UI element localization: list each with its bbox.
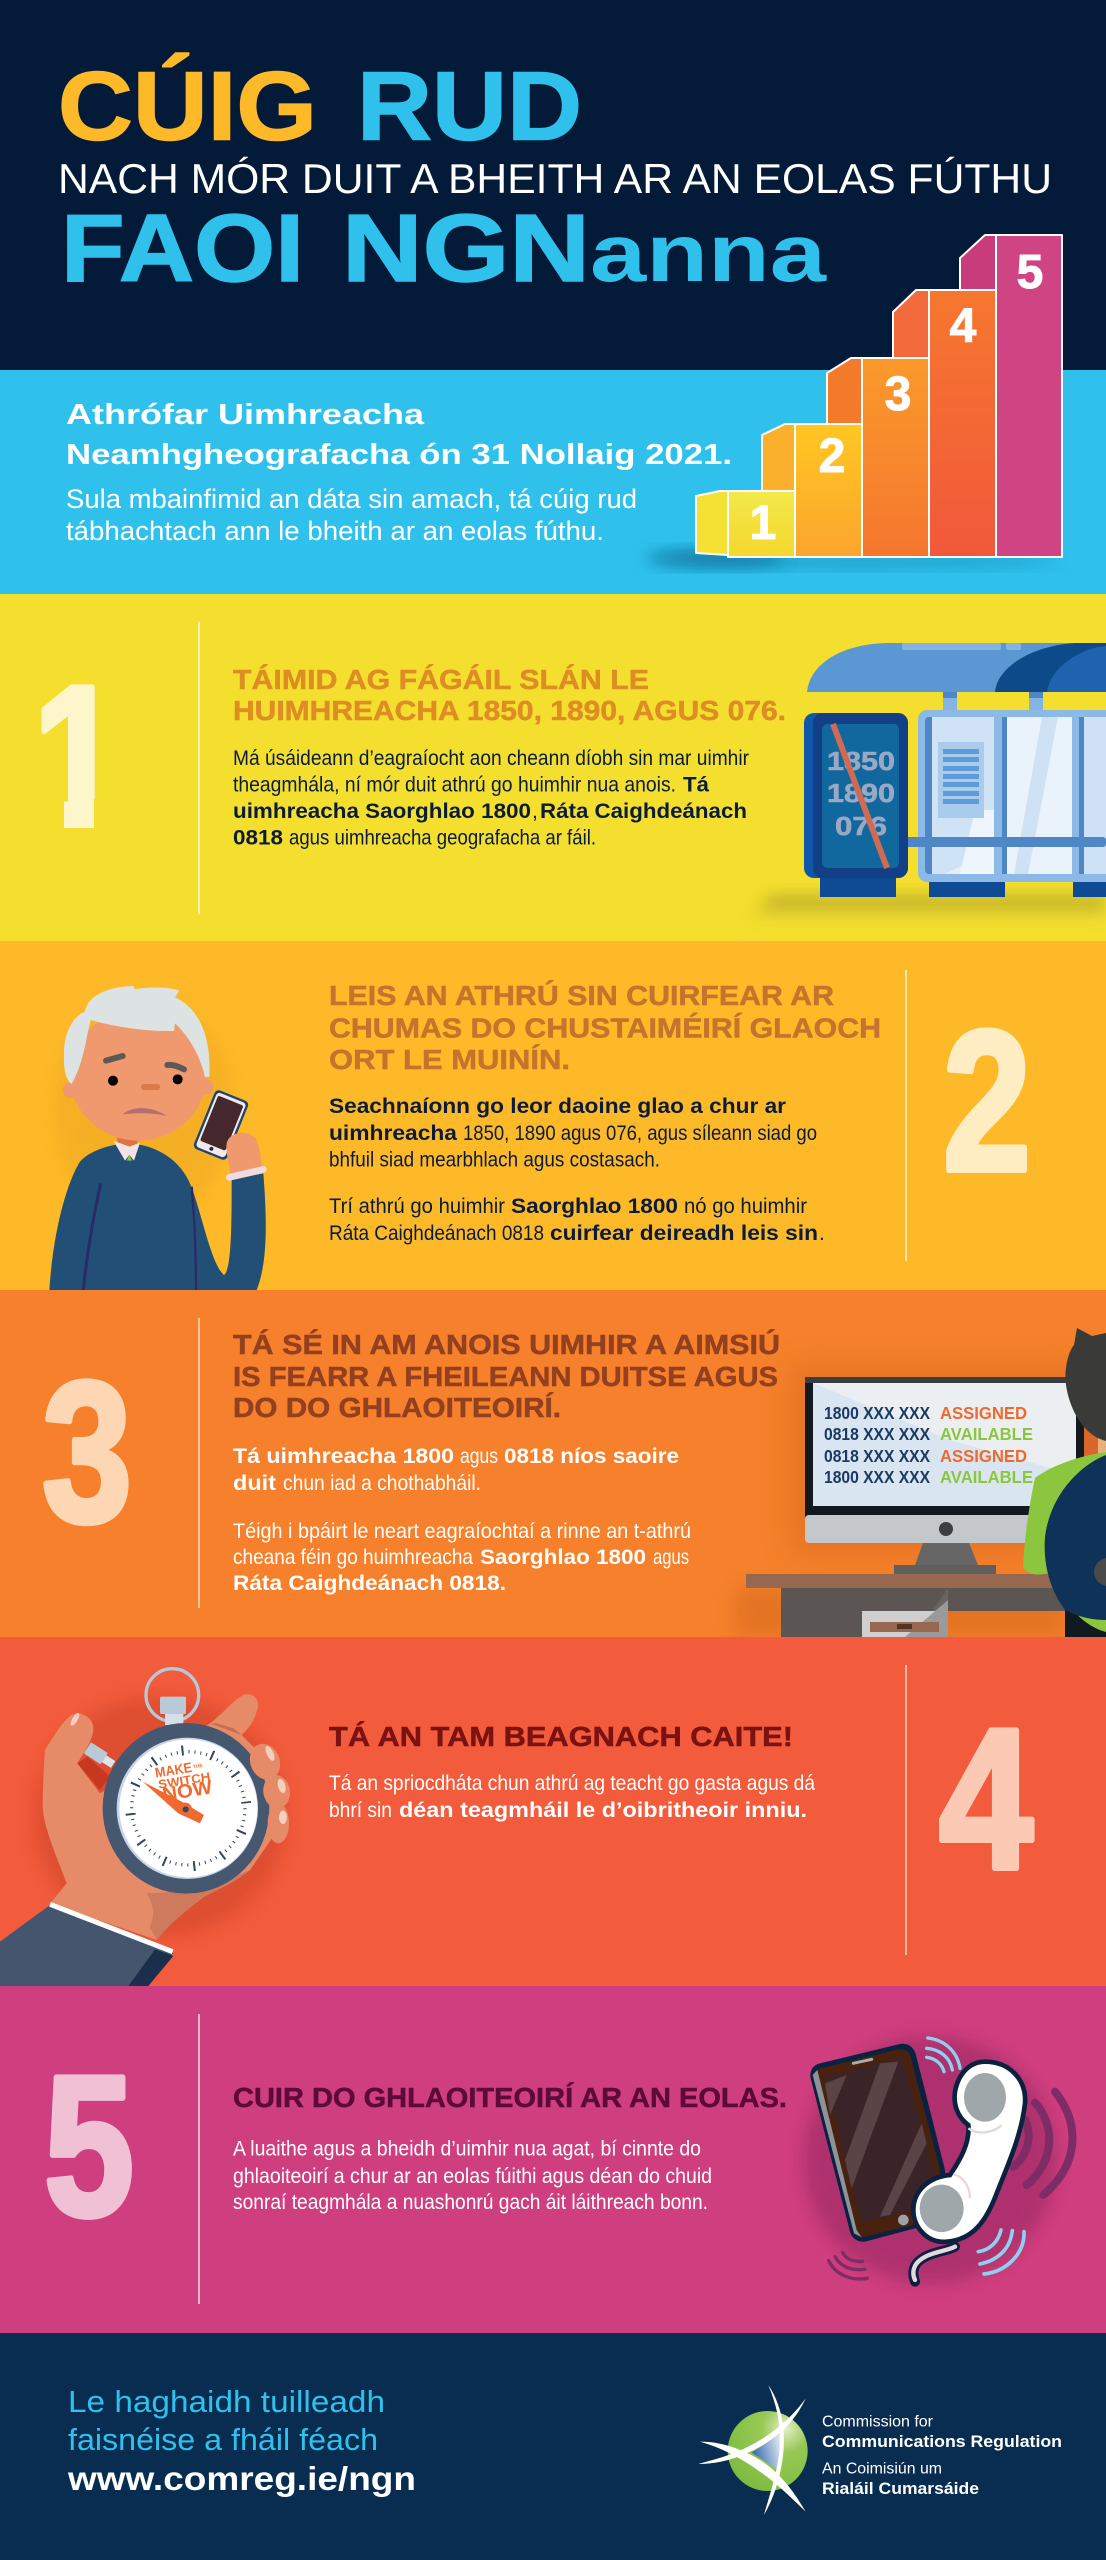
panel: footer [0,2333,1106,2560]
illustration: bus shelter with crossed-out numbers [740,643,1106,925]
heading: step 2: ORT LE MUINÍN. [329,1044,570,1075]
body text: step 2: cuirfear deireadh leis sin [550,1222,818,1245]
intro text block: Athrófar Uimhreacha [66,399,425,431]
body text: step 2: 1850, 1890 agus 076, agus síleann siad go [463,1122,817,1145]
illustration: computer with number list and person: 1800 XXX XXX [824,1403,930,1423]
heading: step 3: DO DO GHLAOITEOIRÍ. [233,1392,561,1423]
body text: step 2 [329,1095,825,1245]
panel: step 4 [0,1637,1106,1986]
heading: step 3: IS FEARR A FHEILEANN DUITSE AGUS [233,1361,778,1392]
panel: step 5 [0,1986,1106,2333]
heading: step 4: TÁ AN TAM BEAGNACH CAITE! [329,1721,793,1752]
illustration: computer with number list and person: 0818 XXX XXX [824,1446,930,1466]
body text: step 5: ghlaoiteoirí a chur ar an eolas fúithi agus déan do chuid [233,2165,712,2188]
intro text block [66,399,732,546]
body text: step 3: Téigh i bpáirt le neart eagraíochtaí a rinne an t-athrú [233,1520,691,1543]
illustration: bus shelter with crossed-out numbers: 076 [835,811,887,841]
icon: staircase of numbered columns [645,235,1062,567]
body text: step 2: Ráta Caighdeánach 0818 [329,1222,544,1245]
title [58,52,1052,302]
heading: step 3 [233,1329,780,1423]
title: anna [590,208,828,299]
icon: staircase of numbered columns: 4 [950,300,977,353]
illustration: computer with number list and person: ASSIGNED [940,1446,1027,1466]
body text: step 2: bhfuil siad mearbhlach agus costasach. [329,1148,660,1172]
illustration: smartphone and ringing handset [803,2037,1072,2283]
body text: step 3: Tá uimhreacha 1800 [233,1445,454,1468]
body text: step 3: cheana féin go huimhreacha [233,1546,473,1569]
illustration: bus shelter with crossed-out numbers: 1890 [827,778,895,808]
body text: step 2: nó go huimhir [684,1195,807,1218]
title: NGN [342,195,590,302]
heading: step 2: LEIS AN ATHRÚ SIN CUIRFEAR AR [329,980,834,1011]
call to action text: Le haghaidh tuilleadh [68,2384,385,2419]
illustration: worried man on the phone [49,986,266,1290]
step number 3: 3 [42,1341,132,1564]
body text: step 2: uimhreacha [329,1122,457,1145]
body text: step 1: Ráta Caighdeánach [540,800,747,823]
title: FAOI [61,195,304,302]
body text: step 1: Tá [683,774,709,796]
panel: intro band [0,370,1106,594]
panel: header background [0,0,1106,370]
body text: step 4: déan teagmháil le d’oibritheoir inniu. [399,1799,807,1822]
illustration: computer with number list and person: 0818 XXX XXX [824,1424,930,1444]
intro text block: tábhachtach ann le bheith ar an eolas fúthu. [66,516,604,546]
body text: step 1: Má úsáideann d’eagraíocht aon cheann díobh sin mar uimhir [233,747,749,770]
body text: step 3: duit [233,1472,276,1495]
logo wordmark: An Coimisiún um [822,2460,942,2478]
body text: step 3: Saorghlao 1800 [480,1546,646,1569]
illustration: hand holding stopwatch: NOW [161,1777,215,1806]
body text: step 1: agus uimhreacha geografacha ar fáil. [289,826,596,850]
step number 5: 5 [44,2035,134,2258]
body text: step 3 [233,1445,691,1595]
logo: ComReg star [698,2385,808,2515]
body text: step 1: , [532,800,538,823]
heading: step 2: CHUMAS DO CHUSTAIMÉIRÍ GLAOCH [329,1012,881,1044]
call to action text [67,2384,416,2497]
logo wordmark: Commission for [822,2414,934,2430]
icon: staircase of numbered columns: 3 [885,368,911,421]
panel: step 1 [0,594,1106,941]
illustration: computer with number list and person [735,1328,1106,1637]
title: RUD [357,52,582,160]
title: CÚIG [58,52,317,160]
illustration: hand holding stopwatch: MAKE [154,1759,193,1781]
icon: staircase of numbered columns: 5 [1017,246,1043,299]
body text: step 2: . [819,1222,825,1245]
body text: step 3: chun iad a chothabháil. [283,1472,481,1495]
body text: step 2: Saorghlao 1800 [511,1195,678,1218]
body text: step 5: sonraí teagmhála a nuashonrú gach áit láithreach bonn. [233,2191,708,2214]
illustration: hand holding stopwatch: THE [193,1763,203,1769]
body text: step 1: 0818 [233,826,283,850]
body text: step 1: uimhreacha Saorghlao 1800 [233,800,531,823]
title: NACH MÓR DUIT A BHEITH AR AN EOLAS FÚTHU [58,155,1052,202]
body text: step 4 [329,1772,815,1822]
intro text block: Neamhgheografacha ón 31 Nollaig 2021. [66,439,732,471]
body text: step 4: bhrí sin [329,1799,392,1822]
heading: step 3: TÁ SÉ IN AM ANOIS UIMHIR A AIMSIÚ [233,1329,780,1360]
call to action text: faisnéise a fháil féach [68,2422,378,2457]
step number 2: 2 [943,990,1031,1213]
illustration: computer with number list and person: AVAILABLE [940,1467,1033,1487]
body text: step 3: Ráta Caighdeánach 0818. [233,1572,506,1595]
icon: staircase of numbered columns: 2 [819,430,845,483]
heading: step 1: HUIMHREACHA 1850, 1890, AGUS 076. [233,695,786,726]
logo wordmark: Communications Regulation [822,2432,1062,2451]
body text: step 3: agus [653,1546,689,1569]
illustration: hand holding stopwatch: SWITCH [157,1770,211,1792]
heading: step 1 [233,664,786,726]
body text: step 1: theagmhála, ní mór duit athrú go huimhir nua anois. [233,774,676,796]
call to action text: www.comreg.ie/ngn [67,2460,416,2497]
body text: step 2: Seachnaíonn go leor daoine glao a chur ar [329,1095,786,1118]
panel: step 2 [0,941,1106,1290]
illustration: computer with number list and person: ASSIGNED [940,1403,1027,1423]
illustration: computer with number list and person: 1800 XXX XXX [824,1467,930,1487]
heading: step 2 [329,980,881,1075]
body text: step 3: agus [460,1445,498,1468]
illustration: computer with number list and person: AVAILABLE [940,1424,1033,1444]
illustration: bus shelter with crossed-out numbers: 1850 [827,746,895,776]
body text: step 3: 0818 níos saoire [504,1445,679,1468]
logo wordmark: Rialáil Cumarsáide [822,2479,979,2498]
heading: step 1: TÁIMID AG FÁGÁIL SLÁN LE [233,664,649,695]
body text: step 1 [233,747,749,850]
panel: step 3 [0,1290,1106,1637]
intro text block: Sula mbainfimid an dáta sin amach, tá cúig rud [66,484,637,514]
body text: step 5: A luaithe agus a bheidh d’uimhir nua agat, bí cinnte do [233,2138,701,2160]
step number 4: 4 [939,1688,1033,1911]
illustration: hand holding stopwatch [0,1669,293,1986]
body text: step 2: Trí athrú go huimhir [329,1195,505,1218]
body text: step 5 [233,2138,712,2214]
heading: step 5: CUIR DO GHLAOITEOIRÍ AR AN EOLAS. [233,2082,787,2113]
step number 1: 1 [33,645,122,868]
logo wordmark [822,2414,1062,2498]
body text: step 4: Tá an spriocdháta chun athrú ag teacht go gasta agus dá [329,1772,815,1795]
icon: staircase of numbered columns: 1 [750,497,776,550]
